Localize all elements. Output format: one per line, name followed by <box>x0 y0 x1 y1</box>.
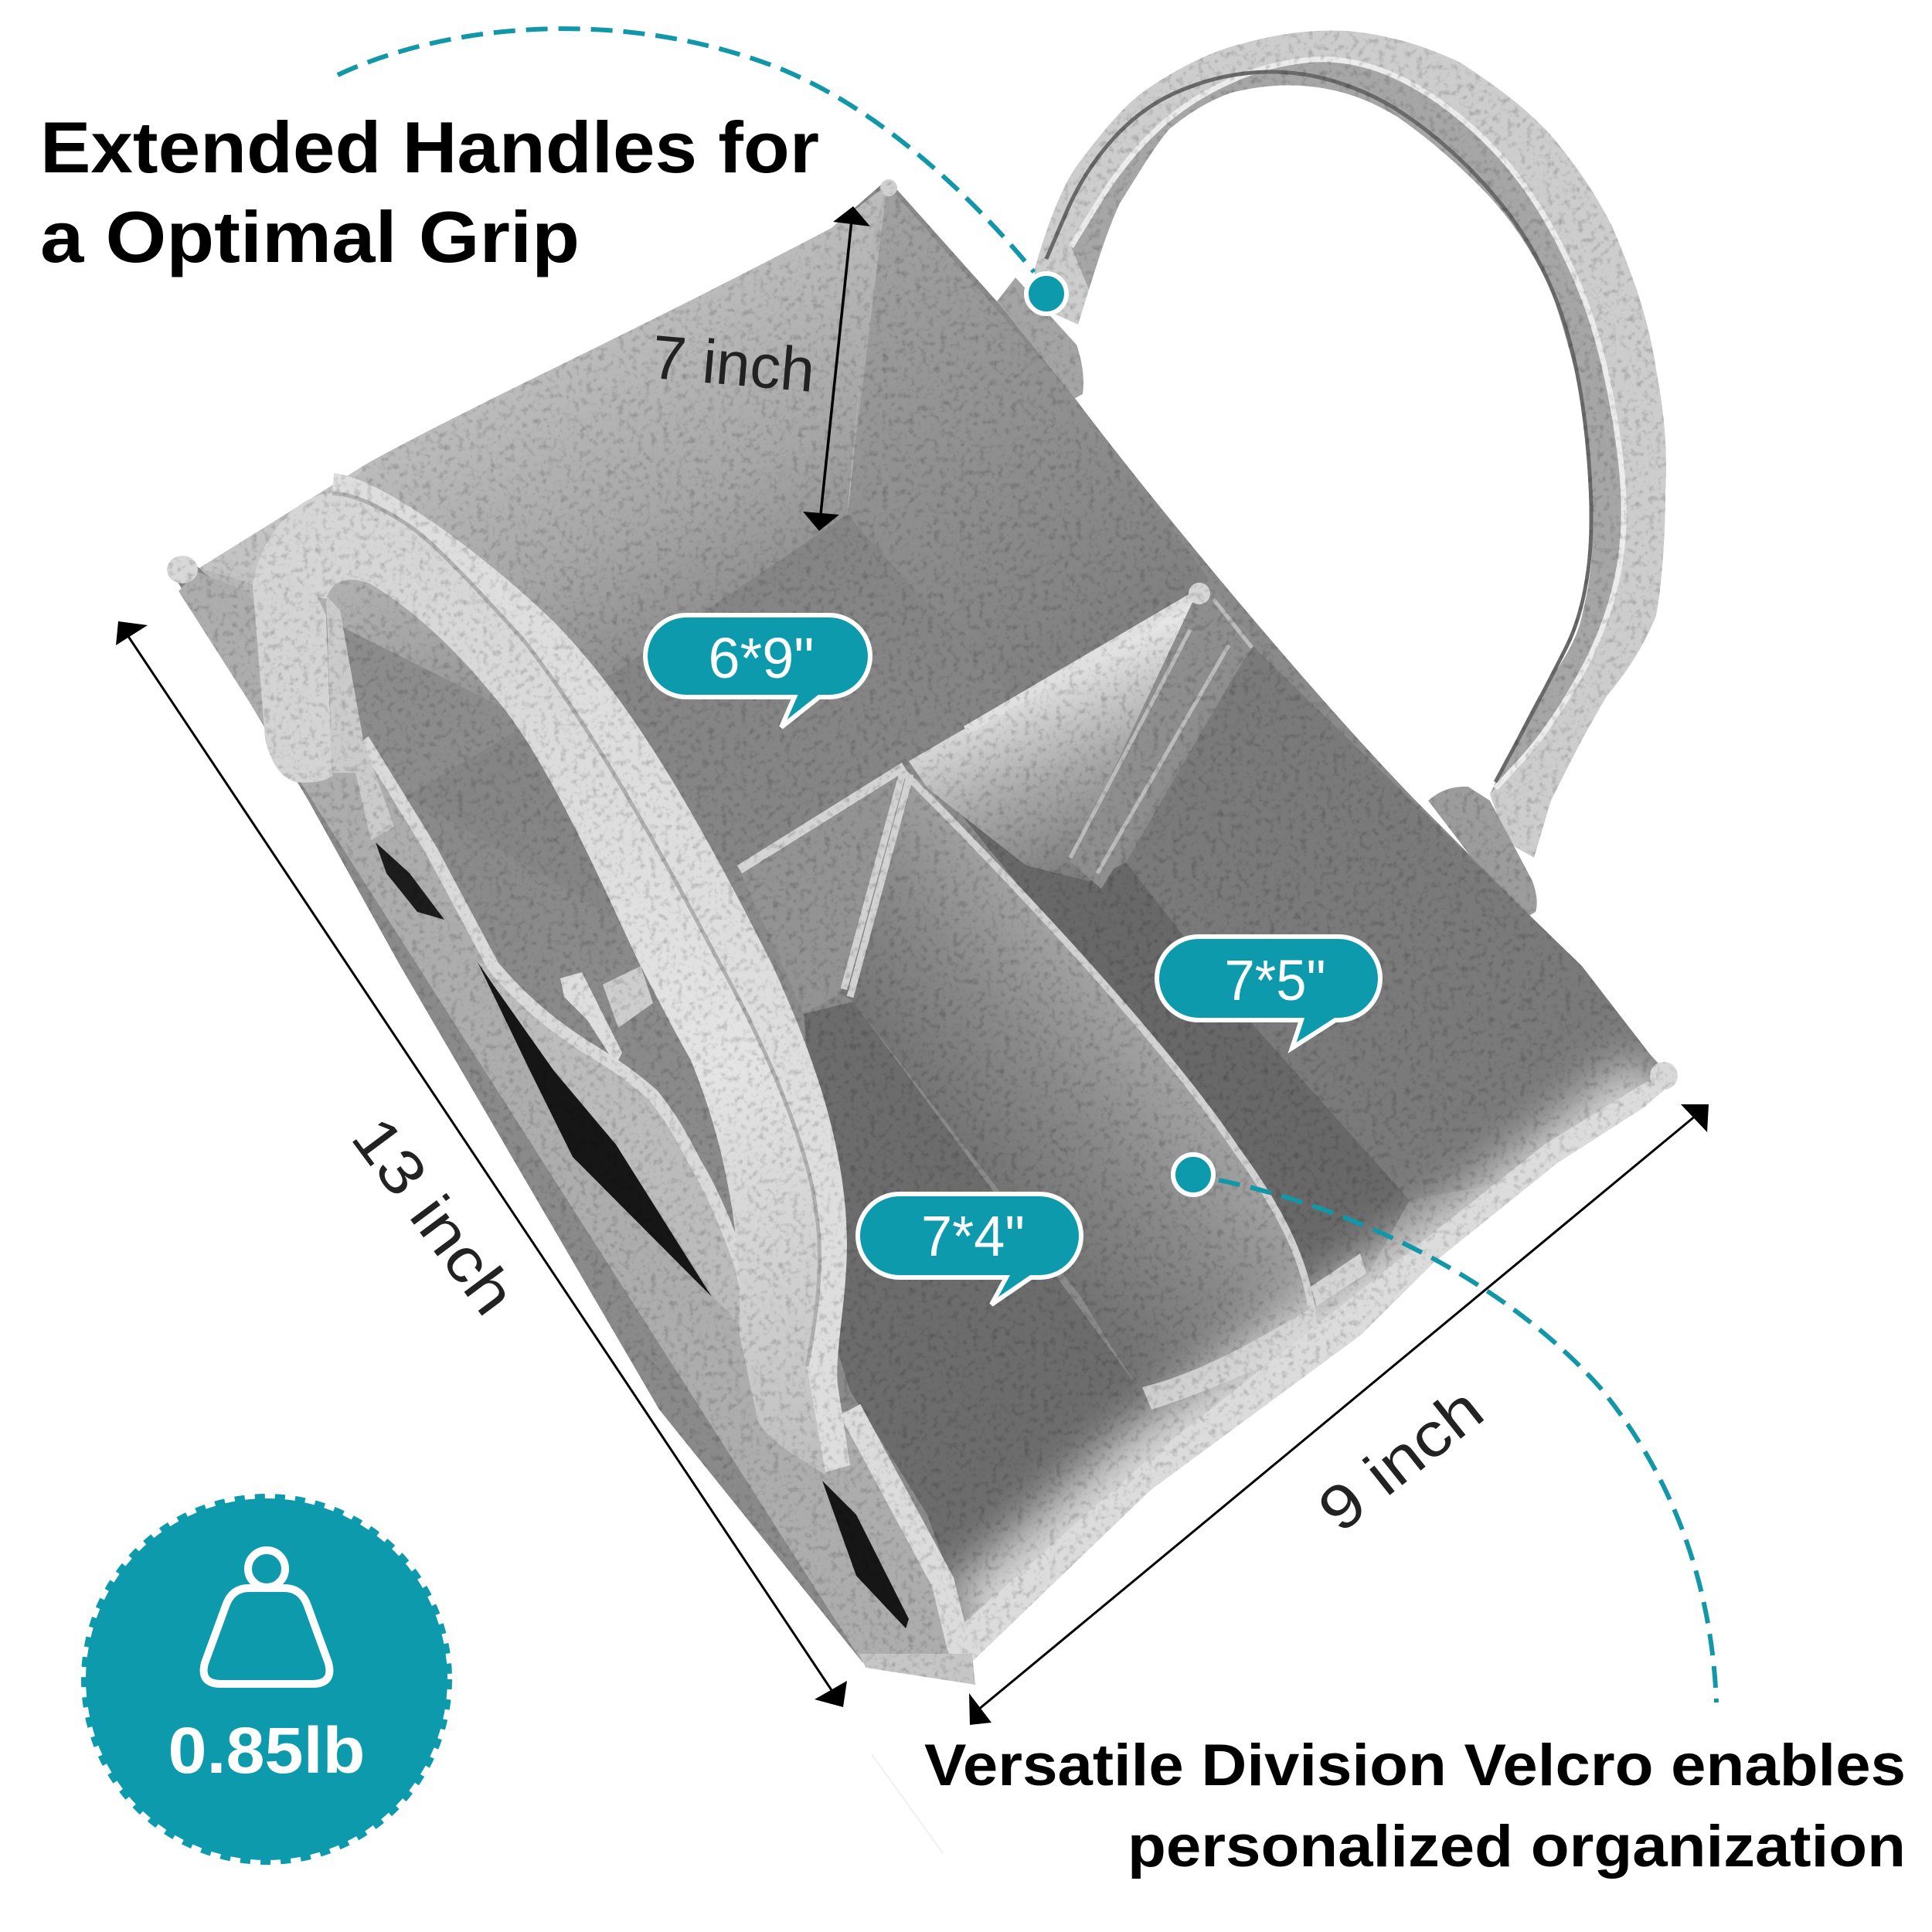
right wall of large compartment <box>847 185 1206 699</box>
fold strip crease <box>332 493 819 1366</box>
back wall of large compartment <box>199 185 887 796</box>
heading: versatile division: Versatile Division Velcro enables <box>924 1733 1906 1798</box>
floor of 6x9 compartment <box>406 515 1014 951</box>
floor of 7x4 compartment <box>804 1002 1345 1620</box>
far extended handle <box>1034 31 1666 858</box>
far handle tab lower <box>1428 787 1537 921</box>
marker dot: handle <box>1026 274 1066 314</box>
dimension arrow: 13 inch <box>116 621 847 1707</box>
heading: versatile division: personalized organization <box>1128 1814 1906 1879</box>
heading: extended handles: Extended Handles for <box>40 107 819 188</box>
far handle tab upper <box>997 277 1083 400</box>
label: 7 inch: 7 inch <box>649 322 818 405</box>
heading: extended handles: a Optimal Grip <box>40 196 580 277</box>
faint line <box>872 1754 943 1853</box>
black pocket slit upper <box>376 842 444 920</box>
bottom corner foot <box>859 1654 975 1685</box>
label: 13 inch: 13 inch <box>338 1104 529 1327</box>
speech bubble: 7x4: 7*4" <box>921 1204 1025 1268</box>
light wall left of handle <box>199 462 369 587</box>
pocket flap <box>478 962 765 1352</box>
divider left top edge <box>740 767 904 869</box>
handle lower end nub <box>253 576 332 783</box>
transverse divider <box>909 595 1194 881</box>
wall of 7x5 compartment <box>1126 645 1665 1200</box>
dimension arrow: 9 inch <box>969 1104 1709 1725</box>
front wall rim <box>964 1082 1673 1662</box>
weight badge <box>85 1498 448 1861</box>
floor of 7x5 compartment <box>927 773 1410 1306</box>
corner nub right <box>1650 1062 1678 1090</box>
black pocket slit lower <box>822 1481 909 1628</box>
speech bubble: 7x5: 7*5" <box>1224 948 1326 1012</box>
product photo: felt caddy <box>167 31 1678 1685</box>
basket body silhouette <box>174 179 1673 1685</box>
badge text: 0.85lb <box>168 1714 365 1787</box>
speech bubble: 7x4 <box>858 1194 1081 1304</box>
speech bubble: 7x5 <box>1157 937 1380 1048</box>
speech bubble: 6x9 <box>645 615 870 727</box>
near wall light edge <box>363 740 761 1352</box>
black pocket slit middle <box>478 962 712 1297</box>
divider bottom lip <box>1142 1306 1317 1410</box>
divider fold with velcro <box>966 583 1256 889</box>
near wall lower light edge <box>850 1410 962 1662</box>
divider left segment <box>740 765 904 1014</box>
divider velcro tab <box>1311 1253 1366 1306</box>
dashed leader: velcro <box>1219 1180 1716 1702</box>
corner nub far <box>880 179 897 196</box>
near handle fold strip <box>332 473 850 1472</box>
small handle strap <box>326 595 394 840</box>
longitudinal divider face <box>841 778 1314 1403</box>
corner nub top left <box>167 556 198 583</box>
front wall soft shading <box>972 1090 1662 1631</box>
dashed leader: handles <box>338 29 1034 272</box>
shaded wall seen through handle loop <box>325 618 541 796</box>
near side wall with pockets <box>179 572 975 1685</box>
corner fold <box>847 185 887 515</box>
icon: weight <box>204 1550 329 1684</box>
velcro tab near handle <box>560 966 653 1065</box>
label: 9 inch: 9 inch <box>1305 1374 1495 1545</box>
near handle main band <box>253 493 825 1475</box>
dimension arrow: 7 inch <box>803 206 870 531</box>
speech bubble: 6x9: 6*9" <box>708 626 815 690</box>
divider top edge <box>844 773 1314 1329</box>
marker dot: velcro <box>1173 1155 1213 1195</box>
